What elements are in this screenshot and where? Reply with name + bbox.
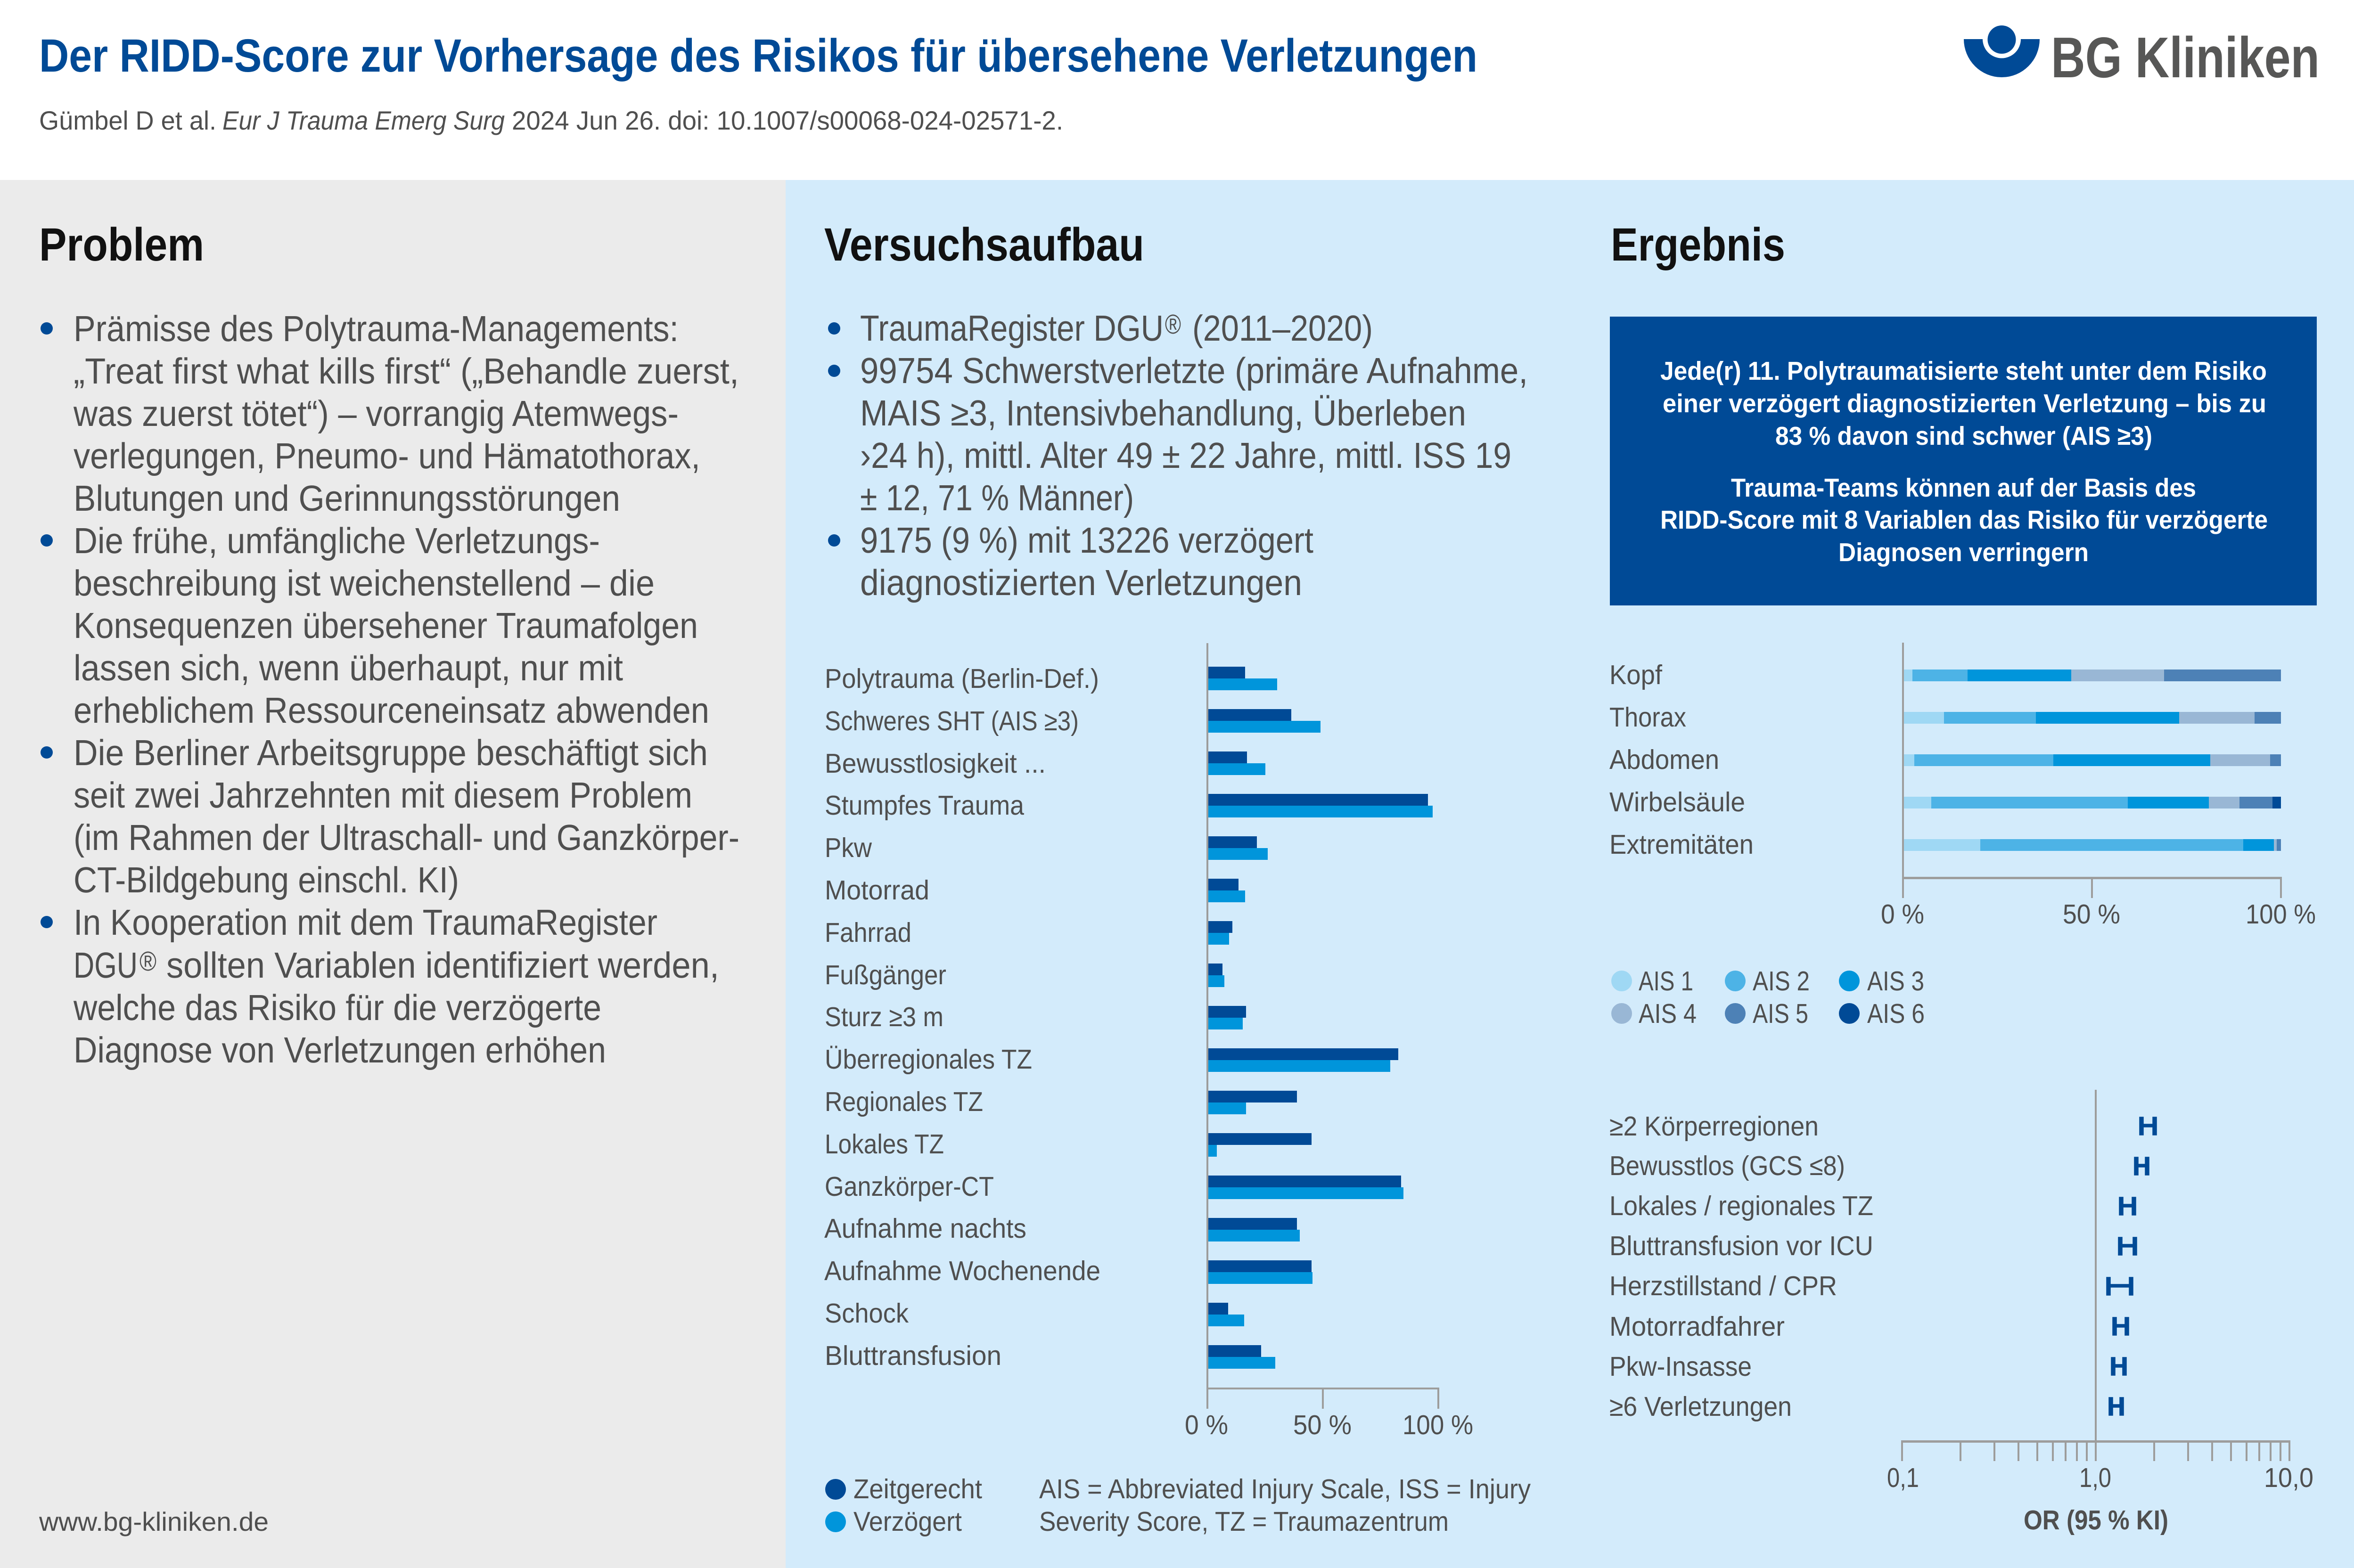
row: Kopf: Kopf (1609, 660, 1663, 690)
row: Aufnahme Wochenende: Aufnahme Wochenende (824, 1256, 1100, 1286)
row: Motorrad: Motorrad (825, 875, 929, 906)
bullet list: Problem: erheblichem Ressourceneinsatz abwenden (74, 690, 709, 731)
axis: percent: 100 % (1403, 1410, 1473, 1440)
row: Schweres SHT (825, 706, 1321, 736)
header (39, 25, 2320, 135)
citation (39, 106, 1063, 135)
row: Schweres SHT: Schweres SHT (AIS ≥3) (825, 706, 1079, 736)
row: Überregionales TZ: Überregionales TZ (825, 1044, 1032, 1075)
legend: AIS grades (1611, 966, 1925, 1029)
bullet list: Problem: In Kooperation mit dem TraumaRegister (74, 902, 657, 943)
citation: Gümbel D et al. (39, 106, 216, 135)
row: Herzstillstand / CPR (1609, 1271, 2133, 1301)
abbreviations note: AIS = Abbreviated Injury Scale, ISS = Injury (1039, 1474, 1531, 1504)
website: www.bg-kliniken.de (39, 1507, 269, 1536)
row: Pkw (825, 833, 1268, 863)
row: Thorax (1609, 702, 2281, 733)
bullet list: Versuchsaufbau: 9175 (9 %) mit 13226 verzögert (860, 520, 1313, 561)
row: Extremitäten (1609, 829, 2281, 860)
legend: AIS grades: AIS 1 (1639, 966, 1693, 996)
axis: percent (1881, 643, 2316, 930)
heading: Problem: Problem (39, 218, 204, 270)
bullet list: Versuchsaufbau: diagnostizierten Verletzungen (860, 563, 1302, 603)
row: Bluttransfusion: Bluttransfusion (825, 1340, 1001, 1371)
row: Fahrrad (825, 917, 1232, 948)
row: Kopf (1609, 660, 2281, 690)
row: Thorax: Thorax (1609, 702, 1686, 733)
row: Bewusstlos: Bewusstlos (GCS ≤8) (1609, 1151, 1845, 1181)
row: Motorrad (825, 875, 1245, 906)
abbreviations note (1039, 1474, 1531, 1537)
legend: AIS grades: AIS 5 (1753, 998, 1808, 1029)
bullet list: Versuchsaufbau: ± 12, 71 % Männer) (860, 478, 1134, 518)
axis: percent: 50 % (2063, 899, 2120, 930)
panel: Problem (0, 180, 786, 1568)
row: Sturz (825, 1002, 1246, 1032)
row: Ganzkörper-CT (825, 1171, 1403, 1202)
row: Polytrauma (825, 663, 1277, 694)
row: Pkw-Insasse: Pkw-Insasse (1609, 1351, 1752, 1382)
callout: key result: 83 % davon sind schwer (AIS ≥3) (1775, 421, 2152, 450)
row: Extremitäten: Extremitäten (1609, 829, 1754, 860)
legend: AIS grades: AIS 2 (1753, 966, 1810, 996)
bullet list: Problem: Konsequenzen übersehener Traumafolgen (74, 605, 698, 646)
bullet list: Versuchsaufbau: ›24 h), mittl. Alter 49 ± 22 Jahre, mittl. ISS 19 (860, 435, 1511, 476)
citation: Eur J Trauma Emerg Surg (222, 106, 505, 135)
row: Ganzkörper-CT: Ganzkörper-CT (825, 1171, 994, 1202)
row: Schock: Schock (825, 1298, 909, 1329)
row: Bewusstlos (1609, 1151, 2149, 1181)
bullet list: Versuchsaufbau: 99754 Schwerstverletzte (primäre Aufnahme, (860, 351, 1528, 391)
title: Der RIDD-Score zur Vorhersage des Risikos für übersehene Verletzungen (39, 29, 1477, 82)
bullet list: Problem: Diagnose von Verletzungen erhöhen (74, 1030, 606, 1070)
bullet list: Problem: „Treat first what kills first“ („Behandle zuerst, (74, 351, 739, 392)
row: Bluttransfusion (825, 1340, 1275, 1371)
row: Aufnahme nachts: Aufnahme nachts (824, 1213, 1026, 1244)
row: Lokales / regionales TZ: Lokales / regionales TZ (1609, 1191, 1873, 1221)
axis: OR log scale: 10,0 (2264, 1462, 2313, 1493)
stacked bar chart: AIS per body region (1609, 643, 2316, 930)
panel: Ergebnis (1582, 180, 2354, 1568)
bullet list: Versuchsaufbau: MAIS ≥3, Intensivbehandlung, Überleben (860, 393, 1466, 433)
axis: OR log scale: OR (95 % KI) (2024, 1505, 2168, 1535)
heading: Versuchsaufbau: Versuchsaufbau (824, 218, 1144, 270)
legend: AIS grades: AIS 4 (1639, 998, 1697, 1029)
row: Wirbelsäule: Wirbelsäule (1609, 787, 1745, 817)
row: Pkw: Pkw (825, 833, 872, 863)
row: Fußgänger (825, 960, 1224, 990)
callout: key result: RIDD-Score mit 8 Variablen das Risiko für verzögerte (1660, 505, 2268, 534)
axis: OR log scale: 0,1 (1887, 1462, 1919, 1493)
callout: key result: Diagnosen verringern (1838, 538, 2089, 567)
bullet list: Problem: Die frühe, umfängliche Verletzungs- (74, 521, 600, 561)
legend: AIS grades: AIS 6 (1867, 998, 1925, 1029)
row: Stumpfes Trauma (825, 790, 1433, 821)
legend: AIS grades: AIS 3 (1867, 966, 1924, 996)
row: Polytrauma: Polytrauma (Berlin-Def.) (825, 663, 1099, 694)
row: Lokales / regionales TZ (1609, 1191, 2136, 1221)
bullet list: Problem: sollten Variablen identifiziert werden, (166, 945, 719, 986)
bullet list: Problem: Blutungen und Gerinnungsstörungen (74, 478, 620, 519)
callout: key result: Jede(r) 11. Polytraumatisierte steht unter dem Risiko (1660, 356, 2267, 385)
row: ≥2 Körperregionen (1609, 1111, 2157, 1142)
row: Pkw-Insasse (1609, 1351, 2126, 1382)
bullet list: Problem: was zuerst tötet“) – vorrangig Atemwegs- (73, 393, 679, 434)
bullet list: Problem: beschreibung ist weichenstellend – die (74, 563, 655, 604)
abbreviations note: Severity Score, TZ = Traumazentrum (1039, 1506, 1449, 1537)
axis: percent: 50 % (1293, 1410, 1352, 1440)
callout: key result: einer verzögert diagnostizierten Verletzung – bis zu (1663, 389, 2266, 418)
callout: key result (1610, 317, 2317, 605)
row: Sturz: Sturz ≥3 m (825, 1002, 943, 1032)
bullet list: Versuchsaufbau: (2011–2020) (1192, 308, 1373, 349)
bullet list: Versuchsaufbau: ® (1165, 309, 1181, 340)
row: Lokales TZ: Lokales TZ (825, 1129, 944, 1160)
legend: Zeitgerecht / Verzögert: Zeitgerecht (853, 1474, 982, 1504)
legend: Zeitgerecht / Verzögert: Verzögert (853, 1506, 962, 1537)
row: Wirbelsäule (1609, 787, 2281, 817)
heading: Ergebnis: Ergebnis (1611, 218, 1785, 270)
row: ≥2 Körperregionen: ≥2 Körperregionen (1609, 1111, 1819, 1142)
row: Stumpfes Trauma: Stumpfes Trauma (825, 790, 1025, 821)
callout: key result: Trauma-Teams können auf der Basis des (1731, 473, 2196, 502)
row: ≥6 Verletzungen (1609, 1391, 2124, 1422)
row: Bewusstlosigkeit: Bewusstlosigkeit ... (825, 748, 1046, 779)
citation: 2024 Jun 26. doi: 10.1007/s00068-024-02571-2. (512, 106, 1063, 135)
axis: percent: 0 % (1185, 1410, 1228, 1440)
bar chart: Zeitgerecht vs Verzögert (824, 643, 1473, 1440)
axis: OR log scale: 1,0 (2079, 1462, 2111, 1493)
row: Abdomen: Abdomen (1609, 744, 1719, 775)
row: Regionales TZ: Regionales TZ (825, 1086, 983, 1117)
bullet list: Problem: CT-Bildgebung einschl. KI) (74, 860, 459, 900)
bullet list: Problem: Prämisse des Polytrauma-Managements: (74, 309, 679, 349)
bullet list: Problem (41, 309, 739, 1070)
row: Bewusstlosigkeit (825, 748, 1265, 779)
forest plot: odds ratios (1609, 1090, 2313, 1535)
row: Aufnahme nachts (824, 1213, 1300, 1244)
axis: OR log scale (1887, 1090, 2313, 1535)
row: Bluttransfusion vor ICU (1609, 1231, 2137, 1261)
legend: Zeitgerecht / Verzögert (825, 1474, 982, 1537)
row: Abdomen (1609, 744, 2281, 775)
axis: percent: 100 % (2246, 899, 2316, 930)
row: Lokales TZ (825, 1129, 1312, 1160)
row: ≥6 Verletzungen: ≥6 Verletzungen (1609, 1391, 1792, 1422)
row: Aufnahme Wochenende (824, 1256, 1312, 1286)
bullet list: Problem: Die Berliner Arbeitsgruppe beschäftigt sich (74, 733, 708, 773)
bullet list: Versuchsaufbau: TraumaRegister DGU (860, 308, 1164, 349)
row: Fahrrad: Fahrrad (825, 917, 911, 948)
row: Schock (825, 1298, 1244, 1329)
axis: percent: 0 % (1881, 899, 1924, 930)
row: Regionales TZ (825, 1086, 1297, 1117)
axis: percent (1185, 643, 1473, 1440)
row: Überregionales TZ (825, 1044, 1398, 1075)
bullet list: Problem: verlegungen, Pneumo- und Hämatothorax, (74, 436, 700, 476)
bullet list: Versuchsaufbau (828, 308, 1528, 603)
bullet list: Problem: (im Rahmen der Ultraschall- und Ganzkörper- (74, 817, 739, 858)
row: Motorradfahrer (1609, 1311, 2129, 1342)
bullet list: Problem: seit zwei Jahrzehnten mit diesem Problem (74, 775, 692, 816)
bullet list: Problem: lassen sich, wenn überhaupt, nur mit (74, 648, 623, 688)
row: Herzstillstand / CPR: Herzstillstand / CPR (1609, 1271, 1837, 1301)
row: Motorradfahrer: Motorradfahrer (1609, 1311, 1785, 1342)
row: Bluttransfusion vor ICU: Bluttransfusion vor ICU (1609, 1231, 1873, 1261)
logo: BG Kliniken (1964, 25, 2320, 90)
bullet list: Problem: DGU (74, 945, 138, 986)
bullet list: Problem: welche das Risiko für die verzögerte (73, 988, 601, 1028)
row: Fußgänger: Fußgänger (825, 960, 946, 990)
bullet list: Problem: ® (139, 946, 156, 977)
panel: Versuchsaufbau (786, 180, 1582, 1568)
